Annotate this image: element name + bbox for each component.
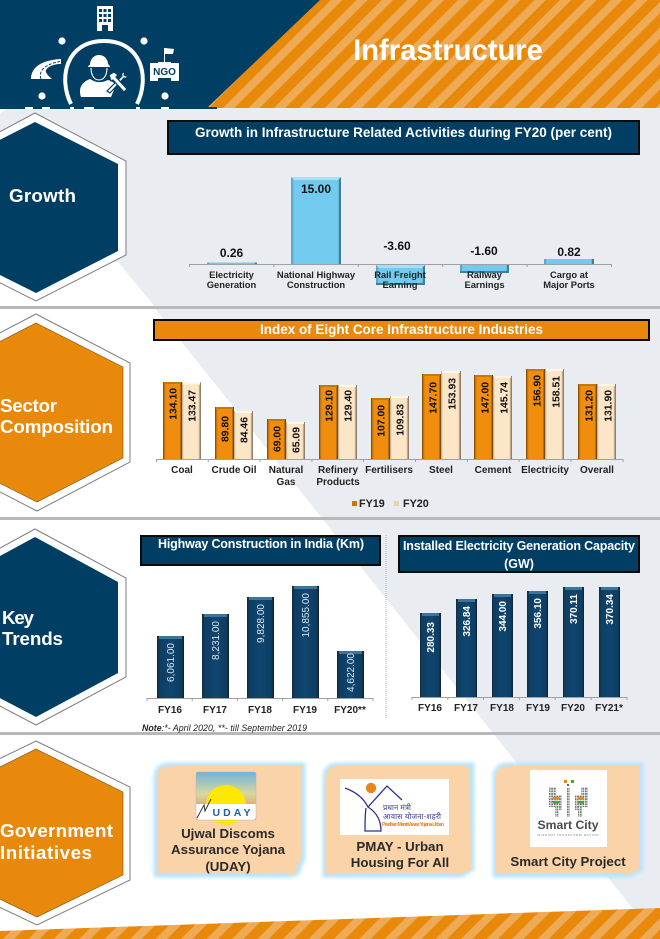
- legend: FY19: [359, 498, 385, 510]
- icon: Smart City logo: MISSION TRANSFORM NATION: [538, 833, 598, 837]
- bar chart: 8,231.00: [211, 621, 222, 660]
- bar chart: 326.84: [462, 606, 473, 637]
- icon: NGO building: NGO: [153, 67, 176, 78]
- bar chart: 147.70: [428, 382, 440, 414]
- legend: FY20: [403, 498, 429, 510]
- bar chart: Electricity: [209, 269, 255, 280]
- bar chart: 370.11: [569, 594, 580, 624]
- icon: PMAY logo: Pradhan Mantri Awas Yojana-Urban: [382, 822, 444, 828]
- icon: office building: [97, 6, 113, 31]
- hexagon: Growth: [0, 113, 126, 301]
- icon: NGO building: [150, 48, 179, 81]
- bar chart: Major Ports: [543, 279, 595, 290]
- hexagon: Key Trends: [0, 529, 126, 725]
- bar chart: 107.00: [376, 405, 388, 437]
- bar chart: 145.74: [500, 382, 510, 414]
- panel: highway construction: [141, 536, 380, 733]
- panel: installed electricity capacity: [399, 536, 639, 714]
- hexagon: Key Trends: Trends: [2, 628, 63, 649]
- bar chart: FY21*: [595, 703, 623, 714]
- icon: PMAY logo: [340, 779, 449, 835]
- chart heading: Highway Construction in India (Km): [158, 537, 364, 551]
- note: Note:*- April 2020, **- till September 2019: [142, 723, 307, 733]
- bar chart: FY19: [293, 705, 317, 716]
- card: Smart City: [496, 766, 640, 874]
- bar chart: Coal: [171, 465, 193, 476]
- bar chart: 69.00: [272, 426, 284, 452]
- bar chart: Natural: [269, 465, 303, 476]
- card: UDAY: Assurance Yojana: [171, 842, 286, 857]
- chart heading: (GW): [504, 557, 534, 571]
- bar chart: Earning: [383, 279, 418, 290]
- bar chart: Generation: [207, 279, 257, 290]
- bar chart: [156, 369, 623, 488]
- bar chart: 0.82: [557, 245, 581, 259]
- bar chart: Construction: [287, 279, 345, 290]
- bar chart: FY17: [203, 705, 227, 716]
- chart heading: [154, 320, 649, 340]
- clipped icon strip: [25, 107, 169, 109]
- bar chart: 84.46: [240, 417, 250, 443]
- bar chart: 109.83: [396, 404, 406, 436]
- bar chart: FY17: [454, 703, 478, 714]
- bar chart: 153.93: [448, 378, 458, 410]
- bar chart: 356.10: [533, 598, 544, 629]
- bar chart: FY16: [158, 705, 182, 716]
- legend: [352, 498, 429, 510]
- hexagon: Key Trends: Key: [2, 607, 35, 628]
- bar chart: 0.26: [220, 246, 244, 260]
- panel: growth in infrastructure activities: [168, 121, 639, 290]
- bar chart: FY16: [418, 703, 442, 714]
- card: PMAY: Housing For All: [351, 855, 449, 870]
- bar chart: 9,828.00: [256, 604, 267, 643]
- bar chart: [147, 586, 373, 716]
- bar chart: 65.09: [292, 427, 302, 453]
- bar chart: Products: [316, 477, 360, 488]
- icon: PMAY logo: प्रधान मंत्री: [383, 803, 412, 812]
- card: PMAY: [326, 766, 471, 874]
- bar chart: 15.00: [301, 182, 331, 196]
- bar chart: FY20: [561, 703, 585, 714]
- hexagon: Government Initiatives: Government: [0, 820, 114, 841]
- bar chart: National Highway: [277, 269, 356, 280]
- bar chart: -3.60: [383, 239, 411, 253]
- chart heading: Installed Electricity Generation Capacity: [403, 539, 635, 553]
- bar chart: FY18: [248, 705, 272, 716]
- bar chart: 344.00: [498, 601, 509, 632]
- card: PMAY: PMAY - Urban: [356, 839, 444, 854]
- icon: infrastructure emblem: [25, 6, 179, 109]
- bar chart: 147.00: [480, 382, 492, 414]
- bar chart: 280.33: [426, 622, 437, 653]
- bar chart: Cement: [475, 465, 512, 476]
- chart heading: [141, 536, 380, 565]
- bar chart: [412, 587, 627, 714]
- bar chart: 158.51: [552, 376, 562, 408]
- bar chart: Fertilisers: [365, 465, 413, 476]
- panel: index of eight core industries: [154, 320, 649, 510]
- bar chart: Railway: [467, 269, 503, 280]
- icon: engineer with tools: [80, 55, 128, 97]
- bottom stripe band: [0, 908, 660, 939]
- icon: UDAY logo: [196, 772, 256, 825]
- bar chart: -1.60: [470, 244, 498, 258]
- bar chart: 6,061.00: [166, 643, 177, 682]
- bar chart: Cargo at: [550, 269, 588, 280]
- bar chart: Gas: [277, 477, 296, 488]
- bar chart: 370.34: [605, 594, 616, 625]
- card: Smart City: Smart City Project: [510, 854, 626, 869]
- card: UDAY: (UDAY): [205, 859, 251, 874]
- hexagon: Government Initiatives: Initiatives: [0, 842, 92, 863]
- bar chart: 134.10: [168, 388, 180, 420]
- bar chart: Crude Oil: [211, 465, 257, 476]
- chart heading: [168, 121, 639, 154]
- title: Infrastructure: [353, 35, 543, 67]
- bar chart: 156.90: [532, 375, 544, 407]
- icon: road: [31, 59, 61, 79]
- bar chart: 129.10: [324, 390, 336, 422]
- bar chart: 133.47: [188, 390, 198, 422]
- bar chart: Steel: [429, 465, 453, 476]
- bar chart: 89.80: [220, 416, 232, 442]
- hexagon: Sector Composition: [0, 314, 130, 511]
- bar chart: Rail Freight: [374, 269, 426, 280]
- chart heading: Index of Eight Core Infrastructure Industries: [260, 322, 543, 337]
- bar chart: 4,622.00: [346, 653, 357, 692]
- header banner: [0, 0, 660, 109]
- bar chart: [190, 177, 612, 290]
- hexagon: Sector Composition: Composition: [0, 416, 113, 437]
- hexagon: Government Initiatives: [0, 741, 130, 925]
- bar chart: FY18: [490, 703, 514, 714]
- bar chart: Overall: [580, 465, 614, 476]
- bar chart: FY19: [526, 703, 550, 714]
- arc and dots: [38, 37, 169, 104]
- icon: Smart City logo: Smart City: [538, 818, 599, 832]
- hexagon: Growth: Growth: [9, 185, 76, 206]
- bar chart: 131.90: [604, 390, 614, 422]
- icon: Smart City logo: [530, 770, 607, 847]
- card: UDAY: Ujwal Discoms: [181, 826, 275, 841]
- bar chart: FY20**: [334, 705, 366, 716]
- card: UDAY: [157, 766, 302, 874]
- bar chart: Earnings: [464, 279, 505, 290]
- icon: UDAY logo: UDAY: [212, 807, 250, 819]
- bar chart: 129.40: [344, 390, 354, 422]
- bar chart: 131.20: [584, 390, 596, 422]
- bar chart: 10,855.00: [301, 593, 312, 638]
- chart heading: [399, 536, 639, 572]
- hexagon: Sector Composition: Sector: [0, 395, 58, 416]
- icon: PMAY logo: आवास योजना-शहरी: [383, 812, 442, 821]
- chart heading: Growth in Infrastructure Related Activities during FY20 (per cent): [195, 125, 612, 140]
- bar chart: Electricity: [521, 465, 569, 476]
- bar chart: Refinery: [318, 465, 358, 476]
